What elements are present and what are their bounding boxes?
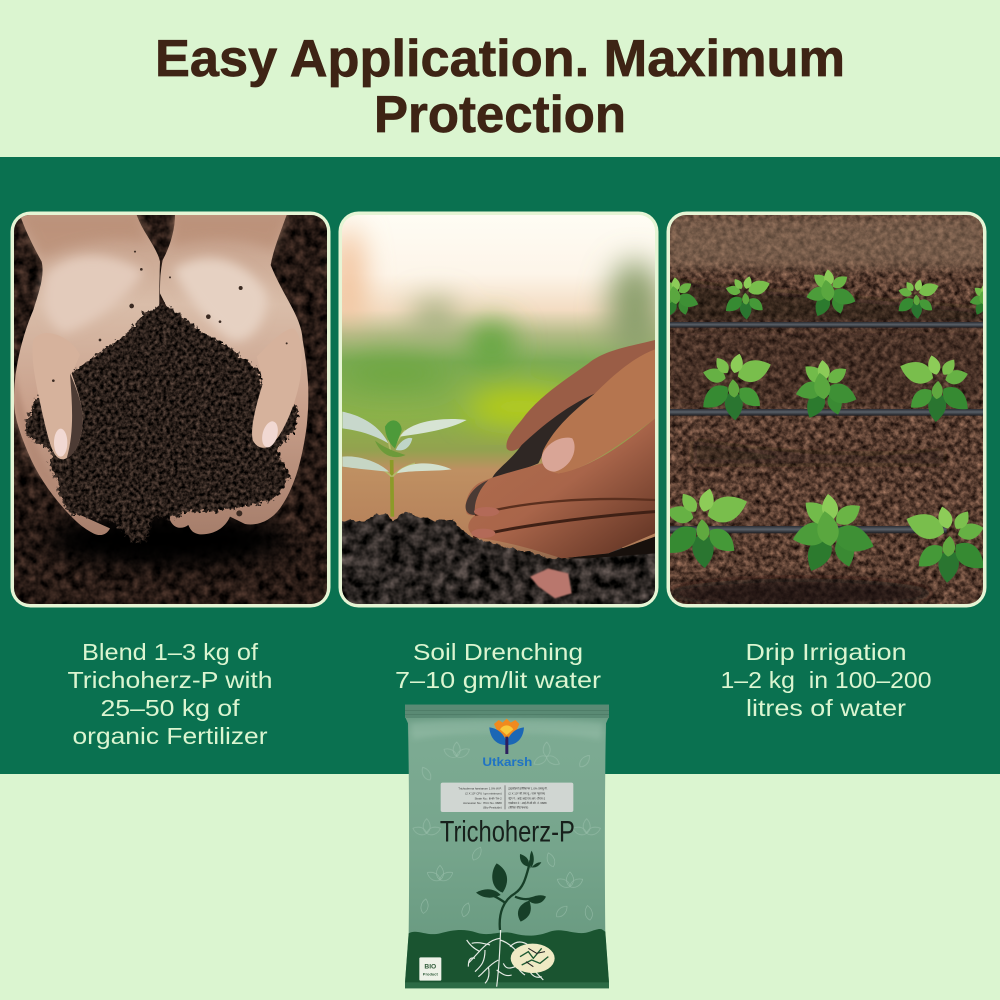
left thumb (32, 333, 83, 459)
composition label: Strain No.: IIHR-TH-2 (475, 797, 502, 801)
soil background (10, 210, 333, 610)
title (155, 30, 845, 144)
composition label: स्ट्रेन नं.: आई.आई.एच.आर.-टीएच-2 (508, 797, 546, 801)
bio product badge: BIO (424, 964, 436, 971)
caption: drip irrigation: litres of water (746, 695, 906, 721)
right hand (160, 215, 308, 534)
bio product badge (419, 957, 441, 981)
root close-up (511, 944, 555, 973)
field soil (667, 210, 990, 610)
title: Easy Application. Maximum (155, 30, 845, 88)
composition label (441, 783, 573, 812)
left hand (14, 215, 160, 535)
soil shading (667, 215, 987, 608)
bag seals and folds (405, 705, 609, 988)
pipe row 2 (667, 409, 987, 416)
logo (482, 719, 532, 769)
caption: drip irrigation: 1–2 kg in 100–200 (720, 667, 932, 693)
plants row 1 (670, 270, 983, 320)
logo: Utkarsh (482, 755, 532, 769)
product name: Trichoherz-P (440, 815, 575, 848)
seedling (342, 412, 467, 517)
composition label: (Bio-Pesticide) (483, 806, 502, 810)
caption: drip irrigation (720, 639, 932, 721)
soil mound (342, 512, 655, 604)
caption: blend: Blend 1–3 kg of (82, 639, 258, 665)
composition label: (2 X 10⁶ CFU / gm minimum) (465, 792, 502, 796)
composition label: एक्सेशन नं.: आई.टी.सी.सी. नं. 6888 (508, 801, 547, 805)
composition label: (2 X 10⁶ सी.एफ.यू. / ग्राम न्यूनतम) (508, 792, 545, 796)
green band (0, 157, 1000, 774)
panel: drip irrigation photo (655, 210, 1000, 610)
caption: blend: 25–50 kg of (100, 695, 240, 721)
pipe row 3 (667, 526, 947, 533)
bag plant (476, 851, 546, 930)
compost mound (25, 303, 298, 542)
blurred field background (335, 210, 662, 610)
caption: drip irrigation: Drip Irrigation (746, 639, 906, 665)
title: Protection (374, 86, 626, 144)
bio product badge: Product (423, 971, 439, 976)
caption: soil drenching: 7–10 gm/lit water (395, 667, 601, 693)
composition label: Accession No.: ITCC No. 6888 (463, 801, 502, 805)
caption: blend (68, 639, 272, 749)
pink clod (530, 568, 572, 598)
plants row 2 (697, 352, 974, 423)
caption: blend: organic Fertilizer (72, 723, 268, 749)
hands holding soil (466, 340, 655, 558)
caption: soil drenching (395, 639, 601, 693)
bag body (405, 705, 609, 988)
panel: soil in hands photo (10, 210, 333, 610)
composition label: ट्राइकोडर्मा हार्जियानम 1.0% डब्ल्यू.पी. (508, 787, 548, 791)
soil band (405, 929, 609, 983)
bag roots (467, 930, 543, 987)
caption: blend: Trichoherz-P with (68, 667, 272, 693)
caption: soil drenching: Soil Drenching (413, 639, 583, 665)
dirt specks (52, 251, 288, 516)
panel: seedling and hands photo (335, 210, 668, 613)
composition label: Trichoderma harzianum 1.0% W.P. (458, 787, 502, 791)
bag foliage pattern (412, 742, 602, 921)
product bag (405, 705, 609, 988)
right thumb (252, 372, 300, 448)
pipe row 1 (667, 322, 987, 328)
composition label: (जैविक कीटनाशक) (508, 806, 528, 810)
plants row 3 (659, 487, 991, 584)
